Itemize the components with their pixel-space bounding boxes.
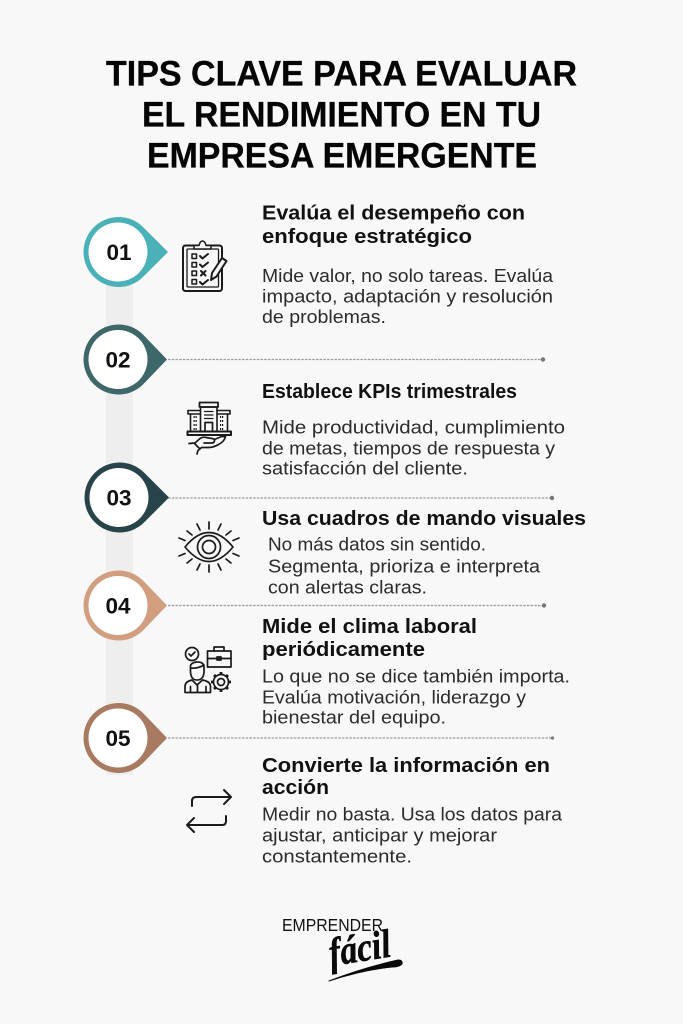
body 1 [262,266,554,327]
heading 4: Mide el clima laboral [262,616,477,638]
heading 3: Usa cuadros de mando visuales [262,508,586,530]
marker 01: 01 [106,240,132,265]
logo: Emprender Fácil: fácil [325,921,394,975]
body 1: impacto, adaptación y resolución [262,286,553,306]
step 5 text [262,755,563,866]
body 5: ajustar, anticipar y mejorar [262,826,497,846]
body 4: bienestar del equipo. [262,708,446,728]
heading 1: enfoque estratégico [262,226,472,248]
body 2: satisfacción del cliente. [262,458,468,478]
heading 4 [262,616,477,661]
heading 5 [262,755,550,799]
title: EL RENDIMIENTO EN TU [142,94,541,134]
body 3: con alertas claras. [268,578,427,598]
timeline spine [106,285,133,775]
heading 1: Evalúa el desempeño con [262,202,525,224]
body 1: Mide valor, no solo tareas. Evalúa [262,266,554,286]
icon: worker with briefcase and gear [185,647,231,692]
heading 4: periódicamente [262,639,425,661]
body 2: de metas, tiempos de respuesta y [262,438,555,458]
body 5 [262,804,563,866]
heading 5: Convierte la información en [262,755,550,777]
dotted connector 02 [168,357,545,362]
body 4 [262,666,570,728]
marker 02: 02 [105,348,131,372]
marker 02 [84,324,167,394]
body 4: Lo que no se dice también importa. [262,666,570,686]
marker 03 [85,463,169,533]
title [106,54,577,176]
marker 04: 04 [105,594,131,618]
step 3 text [262,508,586,598]
step 2 text [262,381,565,478]
body 5: constantemente. [262,846,412,866]
body 5: Medir no basta. Usa los datos para [262,804,563,824]
marker 03: 03 [106,486,132,510]
dotted connector 05 [168,736,554,740]
dotted connector 03 [168,496,554,500]
icon: building on hand [188,402,231,454]
heading 1 [262,202,525,248]
heading 2: Establece KPIs trimestrales [262,381,517,403]
title: TIPS CLAVE PARA EVALUAR [106,54,577,94]
logo: Emprender Fácil [282,915,402,981]
body 2: Mide productividad, cumplimiento [262,418,565,438]
body 2 [262,418,565,478]
body 1: de problemas. [262,307,386,327]
step 4 text [262,616,570,728]
marker 01 [84,217,168,287]
body 4: Evalúa motivación, liderazgo y [262,688,526,708]
marker 04 [84,570,167,640]
dotted connector 04 [168,603,546,608]
icon: exchange arrows [187,790,231,832]
body 3: No más datos sin sentido. [268,534,486,554]
icon: clipboard checklist [183,241,226,291]
title: EMPRESA EMERGENTE [147,136,537,176]
step 1 text [262,202,554,327]
marker 05 [84,703,167,773]
icon: eye with rays [179,522,239,572]
logo: Emprender Fácil: EMPRENDER [282,915,383,935]
marker 05: 05 [105,726,131,751]
heading 5: acción [262,777,329,799]
body 3: Segmenta, prioriza e interpreta [268,556,541,576]
body 3 [268,534,541,598]
